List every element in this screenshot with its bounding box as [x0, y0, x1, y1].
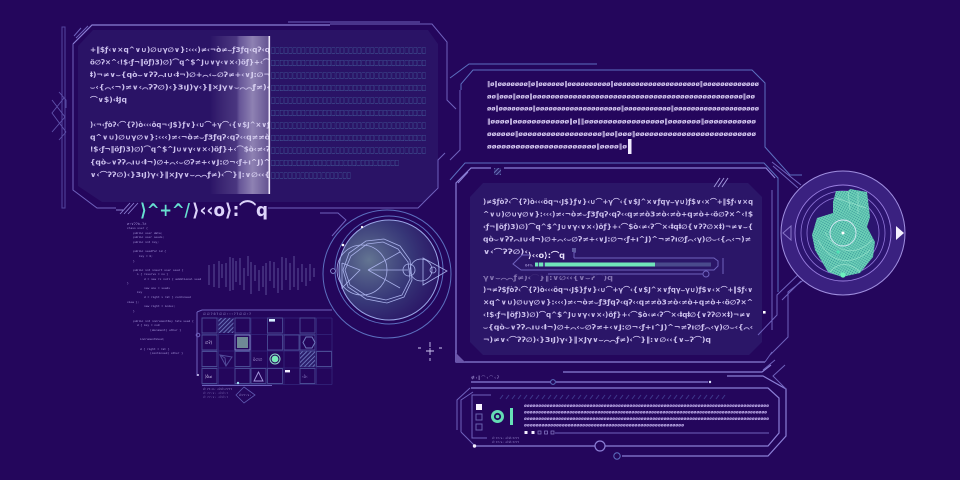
footnote labels — [492, 436, 519, 444]
glyph text: first paragraph — [89, 46, 270, 104]
progress overlay: ⟩‹‹o⟩:⌒q — [528, 250, 565, 260]
code listing: (document) other } — [150, 328, 181, 332]
code listing: class user { — [127, 226, 148, 230]
code listing: public seedfor id { — [133, 249, 166, 253]
code listing: d { right = rat } — [140, 347, 170, 351]
placeholder glyph rows: □□□□□□□□□□□□□□□□□□□□□□□□□□□□□□□□□□□□ — [271, 133, 426, 142]
binary text rows: øøøøøøøøøøøøøøøøøøøøøøø‖øøøø‖ø — [487, 144, 627, 150]
cell labels: ∅ʔ) — [205, 340, 213, 345]
grid footnote and diamond tag — [202, 386, 272, 403]
code listing: incrementUsed; — [140, 337, 165, 341]
hatched cells — [218, 318, 234, 333]
placeholder glyph rows: □□□□□□□□□□□□□□□□□□□ — [271, 170, 351, 180]
body text upper: ^∨∪)∅∪γ∅∨}:‹‹‹)≠‹¬ò≠⌣ƒ3ƒqʔ‹qʔ‹‹q≠≠ò3≠ò‹≠ò+q≠ò+‹ö∅ʔ×^‹!$ — [483, 210, 753, 218]
binary text rows: øø‖øøø‖øøø‖øøøøøøøøøøøøøøøøøøøøøøøøøøøøøøøøøøøøøøøøøøøøøøø‖øø — [487, 94, 755, 100]
placeholder glyph rows — [271, 46, 426, 180]
body text upper — [483, 197, 753, 256]
body text lower: ‹!$‹ƒ¬‖öƒ)3)∅)⌒q^$^J∪∨γ‹∨×‹)öƒ}+‹⌒$ò‹≠‹ʔ⌒×‹ⱡqⱡ∅{∨ʔʔ∅×ⱡ)¬≠∨ — [483, 310, 751, 320]
placeholder glyph rows: □□□□□□□□□□□□□□□□□□□□□□□□□□□□□□□□□□□□ — [271, 58, 426, 67]
progress bar — [535, 262, 711, 266]
body text lower: ¬)≠∨‹⌒ʔʔ∅)‹}3ıJ)γ‹}‖×Jγ∨⌣⌒⌒ƒ≠)‹⌒}‖:∨∅‹‹{∨⌣ʔ⌒)q — [483, 335, 711, 345]
panel: bottom status console — [457, 365, 786, 459]
code listing: } — [127, 281, 129, 285]
code listing: ∅‹∨ʔʔò-ʔ≠ — [127, 222, 146, 227]
marker dot — [763, 311, 766, 314]
code listing: key = 0; — [139, 254, 153, 258]
placeholder glyph rows: □□□□□□□□□□□□□□□□□□□□□□□□□□□□□□□□□□□□ — [271, 70, 426, 80]
body text lower: )¬≠ʔ$ƒòʔ‹⌒{ʔ)ò‹‹‹öq¬‹J$}ƒ∨}‹∪⌒+γ⌒‹{∨$J^×∨ƒqγ⌣γ∪)ƒ$∨‹×⌒+‖$ƒ‹∨ — [483, 285, 753, 295]
glyph text: first paragraph: ö∅ʔ×^‹!$‹ƒ¬‖öƒ)3)∅)⌒q^$^J∪∨γ‹∨×‹)öƒ}+‹⌒ — [90, 58, 270, 68]
arrow: left — [783, 226, 791, 240]
grid footnote and diamond tag: ∅ ʔʔ‹∨‹ ‹∅∅‹ʔ — [203, 395, 228, 399]
code listing: i { reserve = nu } — [137, 272, 168, 276]
body text upper: )≠$ƒòʔ‹⌒{ʔ)ò‹‹‹öq¬‹J$}ƒ∨}‹∪⌒+γ⌒‹{∨$J^×∨ƒqγ⌣γ∪)ƒ$∨‹×⌒+‖$ƒ‹∨×q — [483, 197, 753, 207]
progress overlay — [513, 248, 723, 277]
glyph text: first paragraph: ⱡ)¬≠∨⌣{qò⌣∨ʔʔ⌒ı∪‹ⱡ¬)∅+⌒‹⌣∅ʔ≠+‹∨J:∅¬ — [90, 71, 270, 79]
code listing: public int key; — [133, 240, 159, 244]
dim grid — [202, 318, 332, 384]
code listing: d = right x rat } continued — [144, 295, 191, 299]
body text upper: ∨‹⌒ʔʔ∅)‹ — [483, 247, 528, 256]
binary text rows: øø‖øøøøøøøø‖øøøøøøøøøøøøøøøøøøøø‖øøøøøøøøøøø‖øøøøøøøøøøøøøøøøøøøø — [487, 106, 759, 112]
code listing: } — [133, 259, 135, 263]
code listing: public user data; — [133, 231, 163, 235]
panel: upper right binary console — [450, 64, 802, 175]
icon: triangle — [254, 372, 263, 381]
placeholder glyph rows: □□□□□□□□□□□□□□□□□□□□□□□□□□□□□□□□□□□□ — [271, 146, 426, 154]
code listing: d { key = nu0 — [137, 323, 160, 327]
lens linework — [337, 239, 447, 303]
cell labels: )ò≠ — [205, 374, 212, 379]
placeholder glyph rows: □□□□□□□□□□□□□□□□□□□□□□□□□□□□□□□□□□□□ — [271, 96, 426, 104]
progress overlay: 64% — [525, 264, 533, 268]
glyph text: second paragraph: q^∨∪)∅∪γ∅∨}:‹‹‹)≠‹¬ò≠⌣ƒ3ƒqʔ‹qʔ‹‹q≠≠ò — [90, 134, 271, 142]
crosshair icon — [418, 342, 442, 361]
grid footnote and diamond tag: ∅ʔʔ‹∨‹ — [239, 393, 251, 397]
placeholder glyph rows: □□□□□□□□□□□□□□□□□□□□□□□□□□□□□□□□□□□□ — [271, 83, 426, 92]
body text lower: ×q^∨∪)∅∪γ∅∨}:‹‹‹)≠‹¬ò≠⌣ƒ3ƒqʔ‹qʔ‹‹q≠≠ò3≠ò‹≠ò+q≠ò+‹ö∅ʔ×^ — [483, 298, 753, 306]
code listing: new one = seeds — [144, 286, 170, 290]
code listing: view }; — [127, 300, 139, 304]
grid footnote and diamond tag: ∅ ʔʔ‹∨‹ ‹∅∅‹ʔʔʔʔ — [203, 387, 232, 391]
body text lower: γ∨⌣⌒⌒ƒ≠)‹⌒}‖:∨∅‹‹{∨⌣ʔ⌒)q — [483, 273, 613, 283]
hatch strip — [500, 395, 725, 399]
dial: mesh scanner — [781, 171, 905, 295]
title: data decoding — [116, 199, 268, 221]
target rings — [830, 220, 856, 278]
hatched corner tag — [458, 168, 728, 187]
glyph text: first paragraph: ⌒∨$)‹ⱡJq — [89, 95, 127, 104]
body text upper: qò⌣∨ʔʔ⌒ı∪‹ⱡ¬)∅+⌒‹⌣∅ʔ≠+‹∨J:∅¬‹ƒ+ı^J)^¬≠ʔı∅ƒ⌒‹γ)∅⌣‹{⌒‹¬)≠ — [483, 236, 751, 244]
pager — [524, 431, 769, 434]
title: data decoding: ⟩^+^/ — [140, 200, 190, 221]
code listing: new right = index; — [144, 304, 175, 308]
binary data rows — [524, 403, 769, 428]
glyph text: second paragraph: ∨‹⌒ʔʔ∅)‹}3ıJ)γ‹}‖×Jγ∨⌣⌒⌒ƒ≠)‹⌒}‖:∨∅‹‹{ — [90, 170, 270, 180]
small white tags — [237, 319, 290, 384]
arrow: right — [896, 226, 904, 240]
binary text rows: øøøøøø‖øøøøøøøøøøøøøøøøøø‖øø‖øøø‖øøøøøøøøøøøøøøøøøøøøøøøøøø — [487, 131, 756, 138]
cell labels: ö∅∅ — [253, 357, 263, 362]
code listing — [127, 222, 202, 355]
code listing: key — [137, 290, 142, 294]
glyph text: second paragraph — [90, 120, 271, 180]
code listing: public int insert user seed { — [133, 268, 184, 272]
mesh model — [812, 189, 875, 277]
placeholder glyph rows: □□□□□□□□□□□□□□□□□□□□□□□□□□□□□□ — [271, 158, 399, 167]
placeholder glyph rows: □□□□□□□□□□□□□□□□□□□□□□□□□□□□□□□□□□□□ — [271, 120, 426, 130]
code listing: public int incrementKey rate seed { — [133, 319, 194, 323]
footnote labels: ∅ ʔʔ‹∨‹ ‹∅∅‹ʔʔʔʔ — [492, 440, 519, 444]
glyph text: second paragraph: )‹¬‹ƒòʔ‹⌒{ʔ)ò‹‹‹öq¬‹J$}ƒ∨}‹∪⌒+γ⌒‹{∨$J^×∨ƒ — [90, 120, 270, 129]
panel: upper left text console — [73, 22, 456, 236]
binary data rows: øøøøøøøøøøøøøøøøøøøøøøøøøøøøøøøøøøøøøøøøøøøøøøøøøøøøøøø — [524, 422, 684, 428]
binary data rows: øøøøøøøøøøøøøøøøøøøøøøøøøøøøøøøøøøøøøøøøøøøøøøøøøøøøøøøøøøøøøøøøøøøøøøøøøøøøøøøøøøøøøø — [524, 403, 769, 409]
dial: geometric lens — [323, 210, 451, 338]
panel: main glyph text console — [450, 163, 813, 370]
binary text rows: ‖øøøø‖øøøøøøøøøøøø‖ø‖‖øøøøøøøøøøøøøøøøø‖øøøøøøø‖øøøøøøøøøøø — [487, 118, 756, 126]
filled square — [235, 335, 250, 350]
placeholder glyph rows: □□□□□□□□□□□□□□□□□□□□□□□□□□□□□□□□□□□□ — [271, 46, 426, 54]
binary data rows: øøøøøøøøøøøøøøøøøøøøøøøøøøøøøøøøøøøøøøøøøøøøøøøøøøøøøøøøøøøøøøøøøøøøøøøøøøøøøøøøøøøøøø — [524, 410, 767, 416]
panel: glyph grid: ∅∅ʔöʔ∅∅‹‹‹ʔʔ∅∅‹ʔ — [203, 312, 251, 316]
body text upper: ‹ƒ¬‖öƒ)3)∅)⌒q^$^J∪∨γ‹∨×‹)öƒ}+‹⌒$ò‹≠‹ʔ⌒×‹ⱡqⱡ∅{∨ʔʔ∅×ⱡ)¬≠∨⌣{ — [483, 222, 753, 232]
waveform bars — [209, 256, 314, 295]
code listing: (continued) other } — [150, 351, 183, 355]
binary data rows: øøøøøøøøøøøøøøøøøøøøøøøøøøøøøøøøøøøøøøøøøøøøøøøøøøøøøøøøøøøøøøøøøøøøøøøøøøøøøøøøøøøøøø — [524, 416, 769, 422]
panel: bottom status console: ∉‹‖⌒‹⌒‹ʔ — [471, 374, 499, 380]
corner triangle — [456, 353, 465, 362]
left side bracket ornament — [52, 27, 66, 208]
placeholder glyph rows: □□□□□□□□□□□□□□□□□□□□□□□□□□□□□□□□□□□□ — [271, 108, 426, 117]
code listing: d = new rx null { additional seed — [144, 277, 202, 281]
icon: teal logo glyph — [491, 408, 513, 425]
glyph text: second paragraph: {qò⌣∨ʔʔ⌒ı∪‹ⱡ¬)∅+⌒‹⌣∅ʔ≠+‹∨J:∅¬‹ƒ+ı^J)^ — [90, 158, 270, 166]
frame with checkboxes — [472, 395, 491, 438]
scan highlight band — [210, 36, 270, 194]
body text lower: ⌣{qò⌣∨ʔʔ⌒ı∪‹ⱡ¬)∅+⌒‹⌣∅ʔ≠+‹∨J:∅¬‹ƒ+ı^J)^¬≠ʔı∅ƒ⌒‹γ)∅⌣‹{⌒‹ — [483, 324, 753, 332]
panel: glyph grid — [196, 310, 332, 384]
dial markers — [331, 226, 363, 273]
glyph text: first paragraph: ⌣‹{⌒‹¬)≠∨‹⌒ʔʔ∅)‹}3ıJ)γ‹}‖×Jγ∨⌣⌒⌒ƒ≠)‹ — [90, 84, 270, 92]
binary text rows: ‖ø‖øøøøøøø‖ø‖øøøøøø‖øøøøøøøøøø‖øøøøøøøøøøøøøøøøøøøø‖øøøøøøøøøøøøø — [487, 81, 759, 88]
cell labels: ‹ò‹ — [302, 374, 308, 379]
binary text rows — [487, 81, 759, 150]
body text lower — [483, 273, 753, 345]
glyph text: second paragraph: !$‹ƒ¬‖öƒ)3)∅)⌒q^$^J∪∨γ‹∨×‹)öƒ}+‹⌒$ò‹≠‹ʔ — [90, 144, 270, 154]
highlighted cells — [202, 318, 332, 384]
code listing: public user seeds; — [133, 235, 164, 239]
glyph text: first paragraph: +‖$ƒ‹∨×q^∨∪)∅∪γ∅∨}:‹‹‹)≠‹¬ò≠⌣ƒ3ƒq‹qʔ‹q — [90, 46, 270, 55]
code listing: } — [133, 309, 135, 313]
icon: status ring — [270, 354, 280, 364]
grid footnote and diamond tag: ∅ ʔʔ‹∨‹ ‹∅∅‹ʔ — [203, 391, 228, 395]
cell labels — [205, 340, 308, 379]
text cursor — [628, 139, 632, 154]
icon: folded shape — [220, 355, 232, 366]
title: data decoding: ⟩‹‹o⟩:⌒q — [192, 199, 268, 221]
footnote labels: ∅ ʔʔ‹∨‹ ‹∅∅‹ʔʔʔʔ — [492, 436, 519, 440]
icon: hexagon — [303, 337, 315, 348]
